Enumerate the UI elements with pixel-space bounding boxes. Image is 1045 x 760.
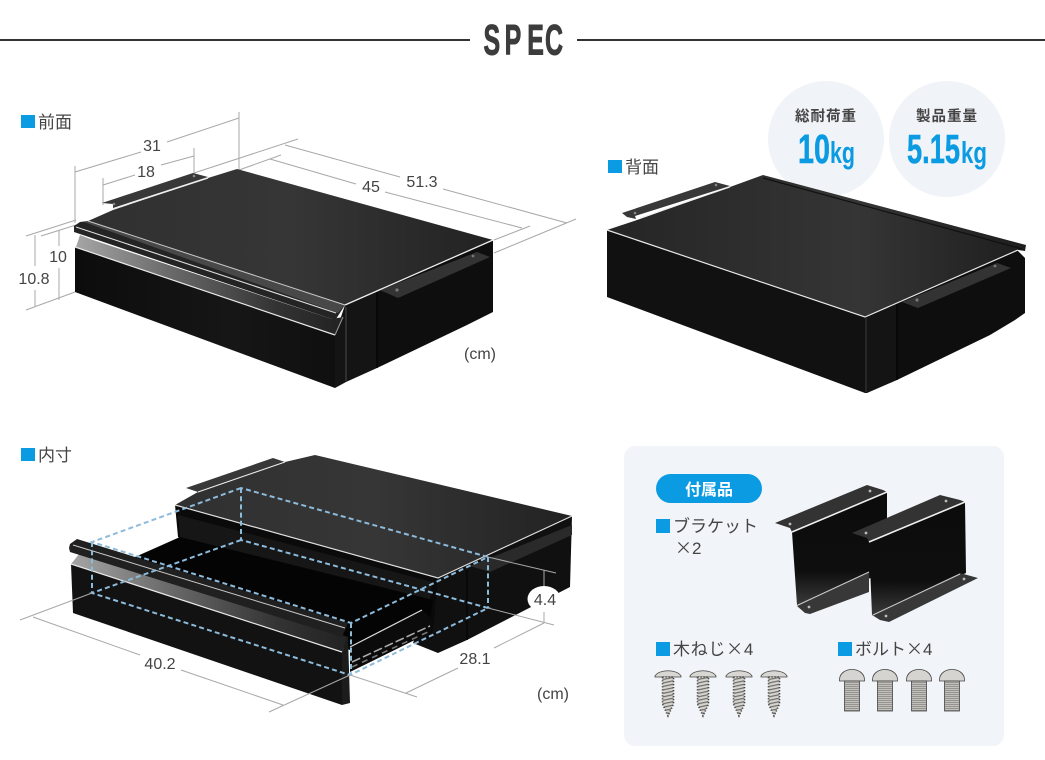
heading: interior dimensions: 内寸	[38, 446, 72, 465]
dimension labels: front view: (cm)	[464, 346, 496, 363]
dimension labels: front view: 10.8	[18, 271, 50, 288]
panel: weight badges	[768, 81, 1005, 197]
dimension lines: front view	[26, 112, 576, 310]
dimension labels: front view: 18	[137, 164, 155, 181]
dimension labels: front view: 10	[49, 249, 67, 266]
heading: back view: 背面	[625, 158, 659, 177]
drawer unit illustration: back view	[607, 175, 1026, 393]
panel: accessories	[624, 446, 1004, 746]
title: SPEC: SPEC	[484, 17, 563, 64]
label: bolts: ボルト×4	[855, 635, 932, 660]
badge: total load capacity: kg	[830, 135, 855, 170]
heading: front view: 前面	[38, 113, 72, 132]
label: brackets	[656, 516, 758, 559]
dimension labels: interior: (cm)	[537, 686, 569, 703]
dimension lines: interior	[20, 557, 556, 712]
inner dimension dashed box	[92, 488, 488, 675]
icon: bolts	[840, 670, 964, 711]
badge: product weight: 製品重量	[916, 108, 978, 125]
label: brackets: ブラケット	[673, 516, 758, 536]
dimension labels: interior	[144, 586, 569, 703]
icon: brackets	[775, 485, 978, 622]
badge: total load capacity: 総耐荷重	[795, 107, 857, 125]
dimension labels: interior: 4.4	[534, 592, 556, 609]
dimension labels: front view: 45	[362, 179, 380, 196]
dimension labels: interior: 28.1	[459, 651, 491, 668]
accessories pill heading	[656, 474, 762, 503]
dimension labels: interior: 40.2	[144, 656, 176, 673]
panel: interior dimensions	[20, 446, 572, 712]
dimension labels: front view: 31	[143, 138, 161, 155]
badge: product weight	[889, 81, 1005, 197]
heading: front view	[21, 113, 72, 132]
heading: back view	[608, 158, 659, 177]
panel: front view	[18, 112, 576, 388]
drawer unit illustration: front view	[74, 169, 493, 388]
heading: interior dimensions	[21, 446, 72, 465]
accessories pill heading: 付属品	[685, 481, 733, 499]
dimension labels: front view: 51.3	[406, 174, 438, 191]
icon: wood screws	[655, 671, 787, 716]
badge: product weight: 5.15	[907, 126, 960, 172]
panel: back view	[607, 158, 1026, 393]
label: brackets: ×2	[675, 534, 701, 559]
badge: product weight: kg	[961, 135, 987, 170]
dimension labels: front view	[18, 138, 496, 363]
label: wood screws: 木ねじ×4	[673, 635, 754, 660]
drawer unit illustration: open drawer	[69, 455, 572, 705]
badge: total load capacity	[768, 81, 884, 197]
badge: total load capacity: 10	[798, 126, 830, 172]
